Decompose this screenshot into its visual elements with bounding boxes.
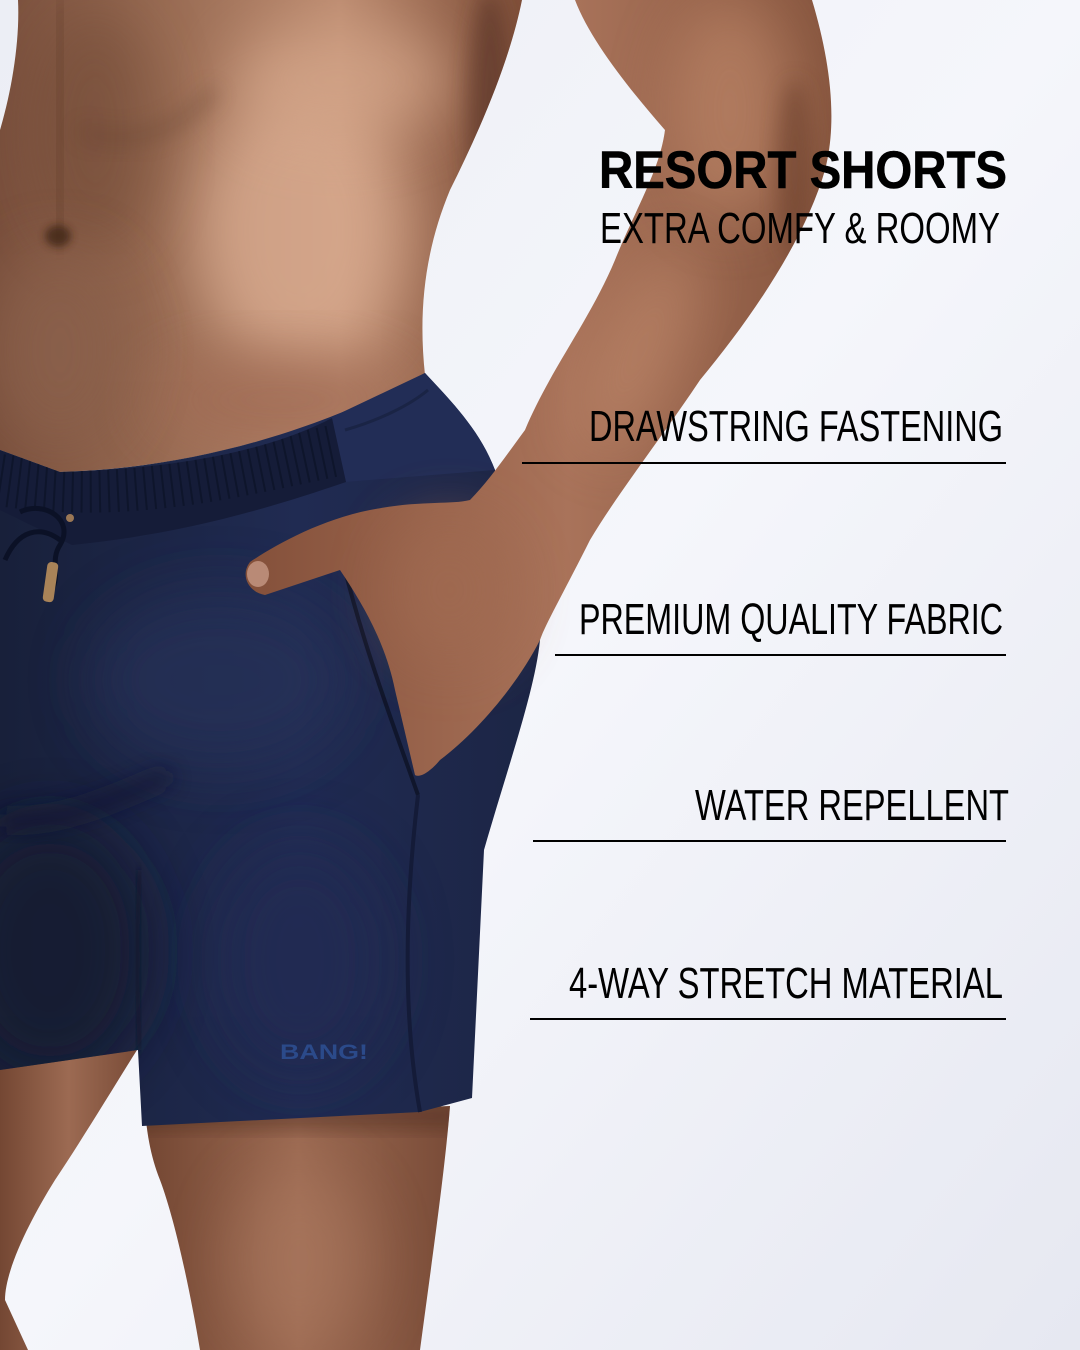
brand logo: BANG!	[280, 1041, 368, 1064]
hand shading	[390, 520, 510, 660]
left leg	[0, 1050, 137, 1350]
thumbnail	[247, 561, 269, 587]
drawstring	[5, 508, 74, 603]
right leg	[130, 1105, 460, 1350]
pocket seam and side slit	[345, 570, 420, 1112]
photo: model in navy shorts	[0, 0, 831, 1350]
torso	[0, 0, 522, 472]
shorts	[0, 373, 540, 1126]
waistband	[0, 373, 495, 545]
arm and hand	[246, 0, 831, 776]
title: RESORT SHORTS	[599, 141, 1007, 200]
